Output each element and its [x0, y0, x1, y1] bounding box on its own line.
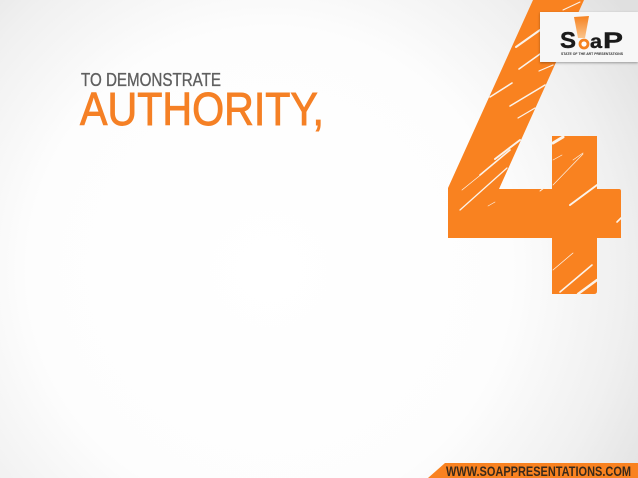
big numeral 4: [448, 0, 621, 294]
logo wordmark: [560, 27, 623, 53]
subheading: TO DEMONSTRATE: [81, 70, 221, 90]
icon: exclamation mark: [574, 16, 589, 48]
logo wordmark: S: [560, 27, 576, 53]
logo wordmark: P: [603, 28, 623, 53]
logo wordmark: a: [590, 32, 602, 53]
logo card: [540, 12, 638, 62]
logo tagline: STATE OF THE ART PRESENTATIONS: [561, 52, 624, 56]
heading: AUTHORITY,: [80, 83, 324, 135]
